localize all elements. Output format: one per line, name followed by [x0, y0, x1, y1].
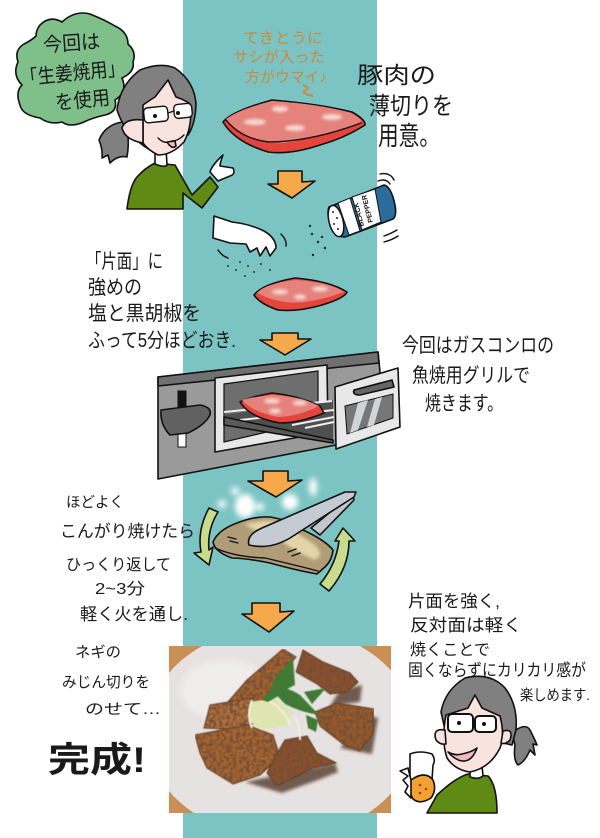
mouth — [448, 748, 477, 761]
line 3: 焼きます。 — [425, 392, 503, 415]
note: marbling tip — [233, 30, 327, 96]
arrow 1 — [268, 171, 315, 198]
grill body — [158, 352, 380, 479]
ponytail — [512, 727, 537, 765]
line 5: 軽く火を通し. — [80, 605, 188, 624]
plate shadow of meat — [245, 685, 378, 793]
arrow 4 — [242, 603, 294, 632]
control knob — [161, 391, 210, 447]
text: closing tip — [408, 592, 590, 704]
neck — [155, 148, 167, 166]
hair back — [117, 65, 196, 150]
character: woman presenting with hand — [99, 65, 234, 209]
pork on rack — [240, 393, 324, 423]
tong front arm — [249, 492, 356, 546]
line 3: 塩と黒胡椒を — [88, 302, 201, 325]
note line 1: てきとうに — [243, 30, 323, 47]
ears — [435, 730, 511, 744]
line 2: みじん切りを — [62, 674, 150, 691]
arrow 3 — [248, 471, 302, 497]
line 4: ふって5分ほどおき. — [88, 329, 236, 352]
line 2: 反対面は軽く — [410, 616, 522, 635]
tong back arm — [311, 494, 354, 535]
steam — [218, 478, 317, 518]
small curved arrow — [303, 85, 313, 96]
line 5: 楽しめます. — [520, 687, 590, 704]
cooked pork slice — [213, 517, 333, 574]
line 1: 「片面」に — [86, 250, 163, 273]
green arrow right — [320, 528, 355, 591]
heading: prepare sliced pork — [357, 62, 453, 151]
glasses — [143, 103, 193, 123]
note line 2: サシが入った — [233, 49, 325, 66]
character: woman with beer — [400, 676, 537, 813]
line 1: ネギの — [75, 644, 121, 661]
seasoned pork slice — [254, 278, 347, 310]
oven opening frame — [215, 365, 328, 452]
torso — [427, 774, 497, 813]
line 1: 片面を強く, — [408, 592, 500, 611]
cooked pork with tongs — [194, 492, 356, 591]
photo: finished dish — [169, 646, 391, 813]
line 1: 今回はガスコンロの — [402, 334, 554, 357]
text: flip and finish — [60, 494, 195, 624]
line 2: 強めの — [88, 276, 142, 299]
glasses — [448, 714, 496, 732]
speech bubble: today's ingredient — [16, 13, 134, 125]
torso — [127, 163, 218, 209]
eyes — [153, 111, 180, 118]
line 2: こんがり焼けたら — [60, 522, 195, 541]
top strip — [158, 352, 379, 386]
sprinkling hand — [213, 216, 286, 277]
shaker label: BLACK — [353, 202, 366, 227]
hair — [441, 676, 516, 745]
shaker label 2: PEPPER — [361, 194, 375, 223]
line 3: ひっくり返して — [66, 556, 171, 574]
text: salt and pepper instruction — [86, 250, 236, 352]
raw pork slice — [223, 100, 365, 153]
meat pieces — [195, 649, 374, 786]
bubble text line 2: 「生姜焼用」 — [19, 57, 126, 90]
ponytail — [99, 122, 128, 163]
arrow 2 — [260, 333, 311, 355]
motion lines — [378, 174, 398, 242]
line 1: 豚肉の — [357, 62, 436, 88]
grill illustration — [158, 352, 400, 479]
green arrow left — [194, 508, 218, 565]
line 3: のせて… — [85, 701, 161, 718]
left ear — [122, 120, 143, 143]
line 1: ほどよく — [66, 494, 124, 511]
leek white — [249, 698, 300, 740]
note line 3: 方がウマイ♪ — [245, 69, 327, 86]
line 2: 魚焼用グリルで — [412, 364, 530, 387]
hand — [210, 155, 234, 181]
rack — [224, 400, 334, 443]
open door — [335, 368, 400, 449]
plate — [169, 646, 391, 813]
face — [143, 80, 191, 155]
neck — [470, 755, 483, 778]
beer glass and hand — [400, 752, 435, 802]
text: topping and done — [48, 644, 161, 780]
bubble text line 1: 今回は — [42, 30, 101, 57]
face — [444, 695, 502, 772]
green onion — [262, 658, 326, 732]
line 3: 用意。 — [378, 121, 440, 151]
background teal column — [183, 0, 377, 838]
pepper grains — [309, 225, 326, 256]
done label: 完成! — [48, 741, 146, 780]
mouth and tongue — [158, 135, 184, 147]
bubble text line 3: を使用 — [54, 86, 111, 115]
line 2: 薄切りを — [369, 93, 453, 120]
pepper shaker — [309, 174, 398, 256]
eyes — [457, 721, 486, 726]
line 3: 焼くことで — [410, 641, 490, 659]
line 4: 2~3分 — [95, 580, 145, 598]
text: fish grill note — [402, 334, 554, 415]
